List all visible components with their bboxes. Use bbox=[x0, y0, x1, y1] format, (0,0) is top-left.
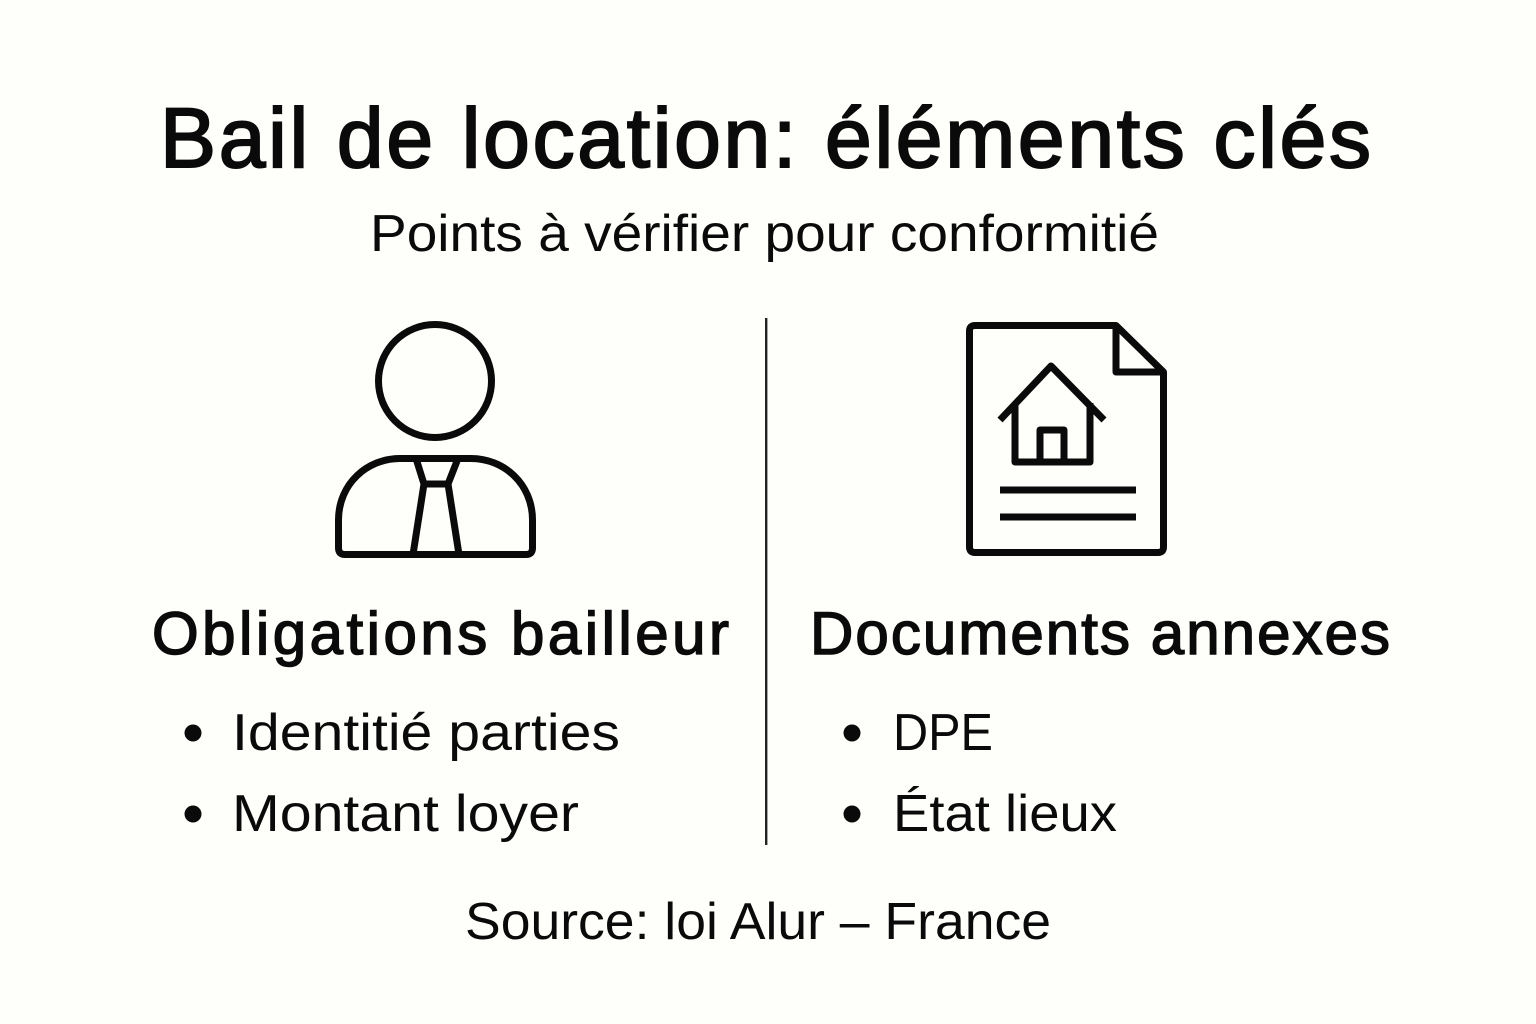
icon: document with house bbox=[970, 326, 1164, 552]
divider bbox=[765, 318, 767, 845]
title: Bail de location: éléments clés bbox=[160, 91, 1371, 185]
source note: Source: loi Alur – France bbox=[465, 893, 1051, 951]
bullet list: documents bbox=[844, 704, 1117, 843]
heading: documents annexes: Documents annexes bbox=[810, 600, 1390, 667]
bullet list: obligations: Montant loyer bbox=[232, 785, 579, 843]
panel: obligations bailleur bbox=[152, 600, 729, 843]
panel: documents annexes bbox=[810, 600, 1390, 843]
bullet list: obligations: Identitié parties bbox=[232, 704, 620, 762]
bullet list: documents: État lieux bbox=[893, 785, 1117, 843]
subtitle: Points à vérifier pour conformitié bbox=[370, 205, 1159, 263]
heading: obligations bailleur: Obligations bailleur bbox=[152, 600, 729, 667]
bullet list: obligations bbox=[184, 704, 620, 843]
icon: person with tie bbox=[338, 324, 532, 554]
bullet list: documents: DPE bbox=[893, 704, 993, 762]
